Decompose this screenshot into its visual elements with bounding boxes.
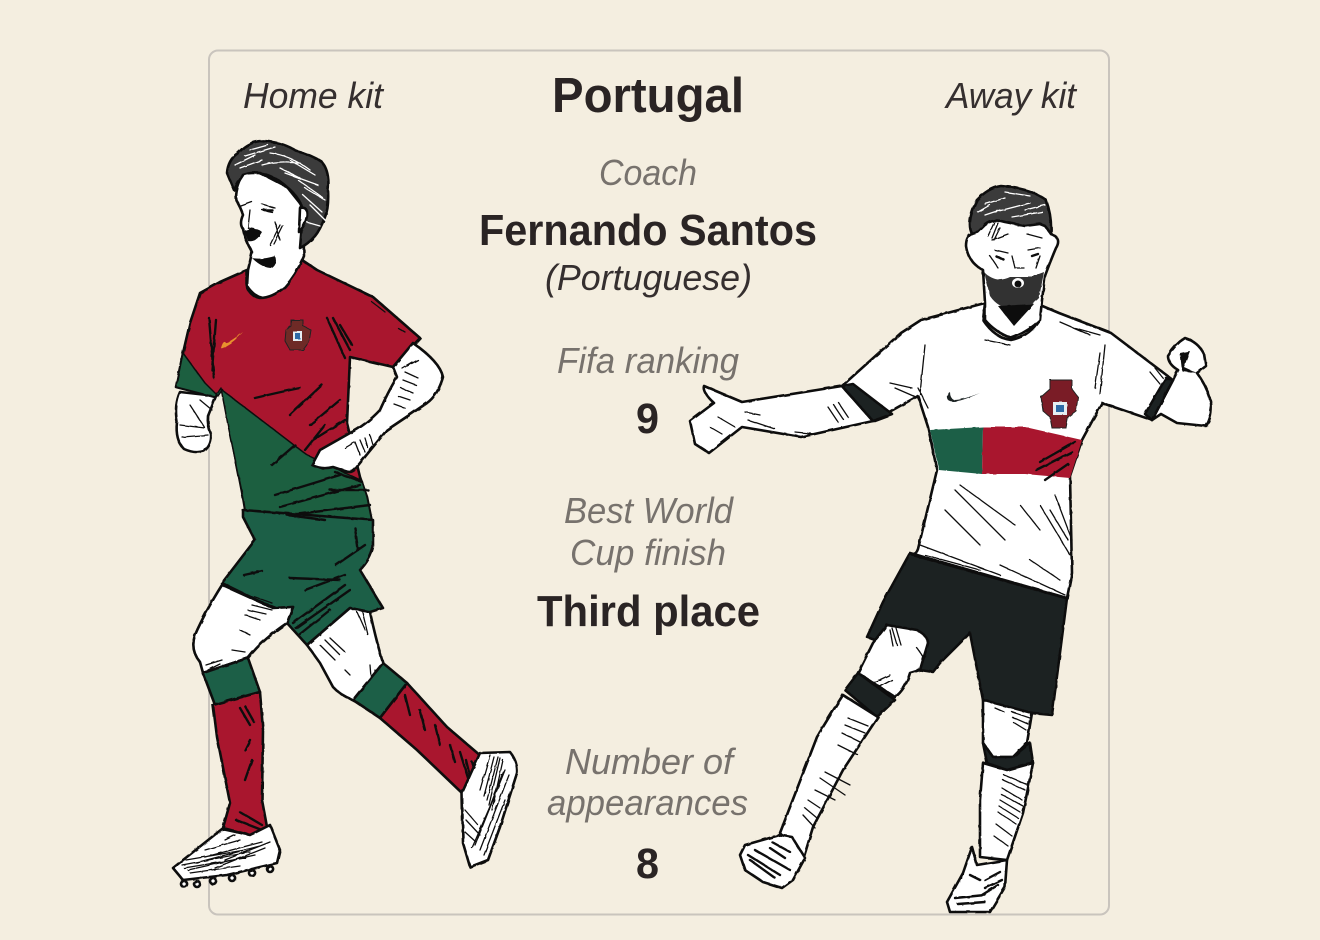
beard [984,272,1044,310]
sleeve hatching [372,302,420,368]
appearances value: 8 [636,840,659,888]
eye shadow [264,209,272,211]
right knee band [983,743,1033,770]
left hand [176,392,216,452]
left thigh [193,585,293,673]
eye shadows [996,254,1038,260]
left thigh [858,625,928,697]
left sleeve cuff [842,384,892,421]
left sock band [203,658,260,705]
best finish label line 1: Best World [564,490,734,531]
left boot [173,825,280,880]
right arm and hand [312,343,443,472]
left hand detail [180,400,212,437]
right boot hatching [955,872,1002,904]
right boot [947,847,1007,912]
right fist shadow [1180,351,1197,373]
illustration: player in home kit [173,141,517,887]
hair highlights [235,145,325,226]
neck shadow [998,304,1034,326]
right lower leg [980,763,1033,860]
jersey [842,303,1173,598]
head and neck [966,200,1058,338]
icon: nike swoosh [947,392,980,402]
jersey fold hatching [209,318,370,515]
shorts [222,510,383,645]
left boot studs [181,866,273,887]
left thigh hatching [875,628,924,688]
right sock band [353,663,407,718]
right boot hatching [465,755,509,855]
ranking value: 9 [636,395,659,443]
coach label: Coach [599,152,697,193]
left sock [213,692,267,835]
mouth [1012,278,1024,288]
left knee band [845,673,895,717]
arm hatching [345,360,418,455]
jersey [176,260,420,527]
left boot [740,835,805,888]
mouth opening [1014,280,1022,288]
left boot hatching [748,842,790,878]
right sock hatching [405,695,478,785]
title: Portugal [552,69,744,123]
ranking label: Fifa ranking [557,340,739,381]
right thigh [983,700,1032,757]
appearances block [547,741,748,888]
right thigh [307,608,383,700]
sash: green [930,427,983,474]
left sock hatching [236,706,262,830]
coach nationality: (Portuguese) [545,257,752,298]
appearances label line 1: Number of [565,741,737,782]
icon: crest [1041,380,1078,428]
right arm and fist [1152,338,1211,426]
shorts fold hatching [244,515,365,634]
mouth [244,229,262,241]
right thigh hatching [995,708,1030,730]
jersey fold hatching [890,322,1163,595]
heading: Home kit: Home kit [243,75,385,116]
icon: nike swoosh [221,332,243,348]
neck shadow [252,256,276,268]
best finish label line 2: Cup finish [570,532,726,573]
left boot hatching [182,835,270,873]
left lower leg hatching [803,718,868,828]
best finish value: Third place [537,587,760,636]
heading: Away kit: Away kit [944,75,1078,116]
sash shading [1036,442,1075,480]
left thigh hatching [206,597,275,670]
sash: red [982,427,1082,478]
best finish block [537,490,760,636]
shorts waist shadow [912,555,1065,598]
left arm and hand [690,386,873,453]
right sock [380,683,482,793]
head and neck [236,173,304,298]
icon: crest [285,320,311,350]
left lower leg [780,695,878,860]
hair [227,141,328,248]
face details [241,202,283,245]
ranking block [557,340,739,443]
jersey green diagonal [176,353,373,527]
left arm hatching [710,402,848,434]
illustration: player in away kit [690,186,1211,912]
right thigh hatching [320,610,375,690]
right sleeve cuff [1145,378,1173,420]
ear [299,208,307,232]
coach block [479,152,817,298]
shorts [867,553,1067,715]
right lower leg hatching [994,775,1028,846]
coach name: Fernando Santos [479,206,817,255]
appearances label line 2: appearances [547,782,748,823]
panel frame [209,50,1109,914]
face details [988,223,1042,268]
hair highlights [978,192,1045,217]
right boot [462,752,517,867]
hair [970,186,1051,234]
